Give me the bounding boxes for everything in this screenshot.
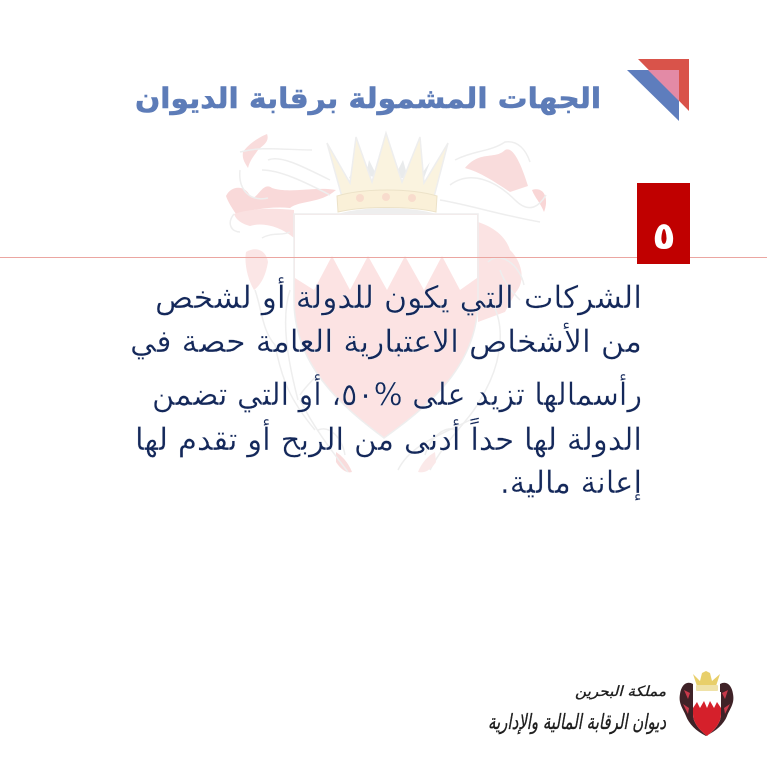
red horizontal rule xyxy=(0,257,767,258)
watermark lower mantling xyxy=(300,360,470,472)
body line 1: الشركات التي يكون للدولة أو لشخص xyxy=(155,277,642,316)
body line 3: رأسمالها تزيد على ‭٥٠%‬، أو التي تضمن xyxy=(152,374,642,413)
watermark shield xyxy=(294,214,478,438)
footer line: kingdom: مملكة البحرين xyxy=(575,684,667,700)
footer line: audit bureau: ديوان الرقابة المالية والإدارية xyxy=(488,710,666,735)
footer emblem xyxy=(680,671,733,736)
body line 2: من الأشخاص الاعتبارية العامة حصة في xyxy=(130,322,642,360)
title: الجهات المشمولة برقابة الديوان xyxy=(135,82,601,115)
watermark crown xyxy=(327,133,448,214)
watermark: Bahrain coat of arms xyxy=(226,133,546,472)
number badge xyxy=(637,183,690,264)
badge number: ٥ xyxy=(652,214,676,258)
body line 5: إعانة مالية. xyxy=(500,465,642,501)
watermark mantling left xyxy=(226,134,336,430)
footer logo text xyxy=(488,684,667,735)
body line 4: الدولة لها حداً أدنى من الربح أو تقدم لها xyxy=(135,417,642,458)
icon: overlapping triangles xyxy=(627,59,689,121)
watermark mantling right xyxy=(430,142,546,470)
body paragraph xyxy=(130,277,642,501)
